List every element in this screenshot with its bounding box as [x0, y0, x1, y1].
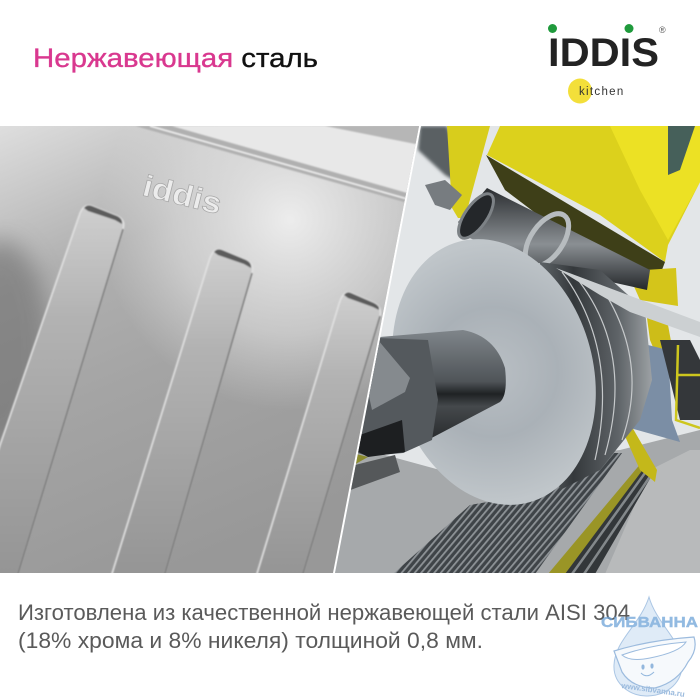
site url: www.sibvanna.ru	[620, 681, 685, 699]
description text: Изготовлена из качественной нержавеющей стали AISI 304	[18, 600, 630, 625]
yellow machine frame	[447, 126, 700, 352]
bathtub	[614, 637, 695, 688]
brand name: СИБВАННА	[601, 615, 699, 631]
upper roller	[425, 180, 650, 290]
yellow blob	[568, 78, 592, 104]
watermark: sibvanna	[601, 597, 699, 699]
registered mark: ®	[659, 25, 666, 35]
floor rails	[548, 462, 655, 574]
coil mandrel	[356, 330, 506, 464]
top rim of sink	[135, 126, 425, 208]
groove 3	[255, 292, 380, 580]
groove 1	[0, 205, 124, 580]
steel coil side	[540, 262, 652, 490]
dark left shading	[0, 240, 50, 450]
text: (18% хрома и 8% никеля) толщиной 0,8 мм.	[18, 628, 483, 653]
kitchen wordmark: kitchen	[579, 86, 625, 98]
logo wordmark: IDDIS	[548, 31, 659, 75]
floor drag chain	[393, 453, 622, 574]
embossed iddis mark: iddis	[139, 170, 225, 221]
title: Нержавеющая сталь	[33, 43, 318, 73]
logo green dots	[548, 24, 634, 33]
tub face	[641, 663, 654, 676]
groove 2	[110, 249, 253, 580]
factory floor	[330, 430, 700, 574]
logo: iddis kitchen	[548, 24, 666, 104]
water drop	[614, 597, 682, 696]
machinery right side	[626, 340, 700, 482]
panel: brushed steel sink	[0, 126, 425, 580]
steel strip	[556, 268, 700, 337]
steel coil face	[393, 239, 596, 505]
dark beam background	[416, 126, 450, 180]
panel: steel coil factory photo	[330, 126, 700, 574]
tub rim	[622, 642, 686, 659]
